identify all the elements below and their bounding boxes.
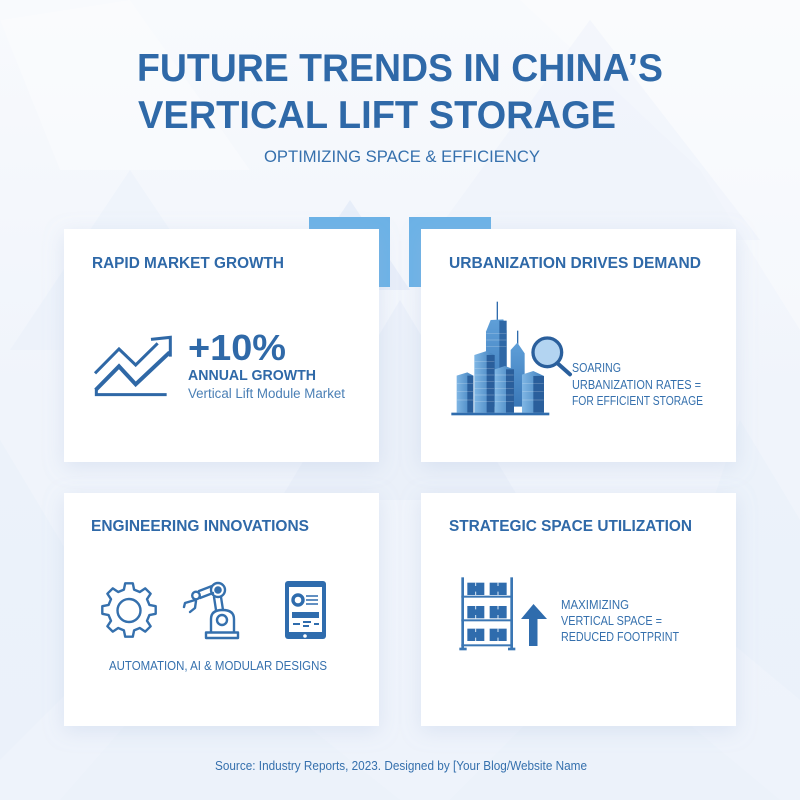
heading: engineering: ENGINEERING INNOVATIONS (91, 518, 309, 535)
description: space: VERTICAL SPACE = (561, 614, 662, 628)
title: VERTICAL LIFT STORAGE (138, 94, 616, 137)
source footer: Source: Industry Reports, 2023. Designed by [Your Blog/Website Name (215, 759, 587, 773)
description: market: Vertical Lift Module Market (188, 386, 345, 401)
title: FUTURE TRENDS IN CHINA’S (137, 47, 663, 90)
title (137, 47, 663, 137)
description: urbanization: URBANIZATION RATES = (572, 378, 701, 392)
panel: urbanization drives demand (421, 229, 736, 462)
icon: city skyline (451, 302, 570, 415)
icon: gear (102, 583, 156, 637)
heading: rapid market growth: RAPID MARKET GROWTH (92, 255, 284, 272)
description: space: REDUCED FOOTPRINT (561, 630, 679, 644)
stat: +10%: +10% (188, 327, 286, 368)
description: space (561, 598, 679, 644)
panel: engineering innovations (64, 493, 379, 726)
icon: up arrow (521, 604, 547, 646)
description: automation: AUTOMATION, AI & MODULAR DESIGNS (109, 659, 327, 673)
icon: growth chart arrow (95, 337, 170, 395)
description: urbanization (572, 361, 703, 408)
icon: robot arm (184, 583, 238, 638)
description: space: MAXIMIZING (561, 598, 629, 612)
stat label: annual growth: ANNUAL GROWTH (188, 367, 316, 384)
icon: tablet (285, 581, 326, 639)
panel: rapid market growth (64, 229, 379, 462)
subtitle: OPTIMIZING SPACE & EFFICIENCY (264, 148, 540, 166)
accent bracket: left (309, 217, 390, 287)
heading: urbanization: URBANIZATION DRIVES DEMAND (449, 255, 701, 272)
description: urbanization: FOR EFFICIENT STORAGE (572, 394, 703, 408)
accent bracket: right (409, 217, 491, 287)
panel: strategic space utilization (421, 493, 736, 726)
description: urbanization: SOARING (572, 361, 621, 375)
icon: storage rack (459, 577, 515, 650)
heading: strategic: STRATEGIC SPACE UTILIZATION (449, 518, 692, 535)
